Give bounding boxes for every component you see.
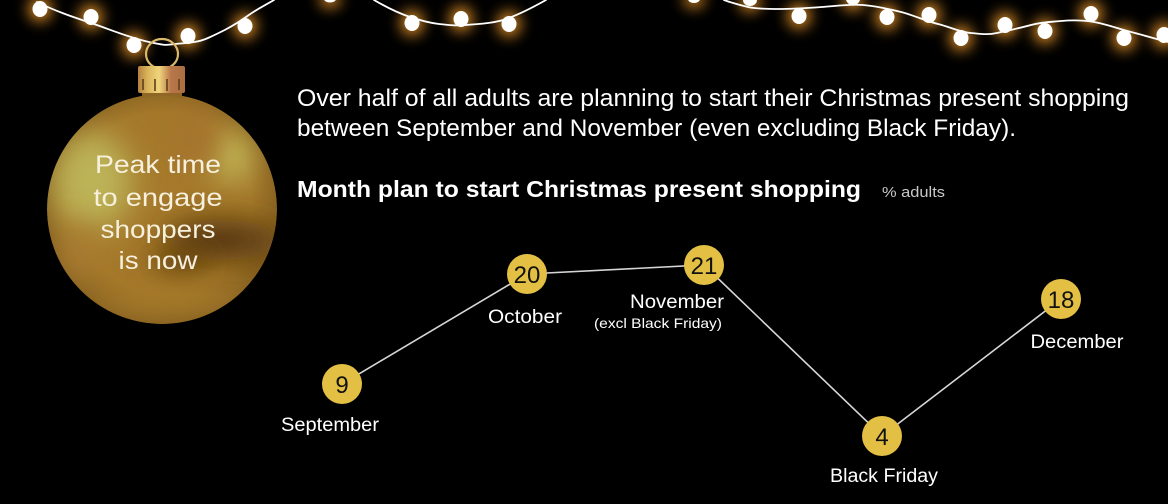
trend line bbox=[342, 265, 1061, 436]
line chart bbox=[281, 245, 1124, 487]
intro text: Over half of all adults are planning to start their Christmas present shopping bbox=[297, 85, 1129, 112]
point: Black Friday 4: 4 bbox=[875, 424, 889, 451]
chart heading: Month plan to start Christmas present shopping bbox=[297, 176, 861, 202]
string lights bbox=[28, 0, 1168, 58]
point: December 18 bbox=[1030, 279, 1124, 353]
point: November 21: November bbox=[630, 292, 725, 313]
point: Black Friday 4 bbox=[830, 416, 939, 487]
chart unit label: % adults bbox=[882, 184, 945, 201]
point: December 18: December bbox=[1030, 332, 1124, 353]
icon: bauble ring bbox=[146, 39, 178, 69]
bauble text: Peak time bbox=[95, 151, 221, 179]
intro text: between September and November (even excluding Black Friday). bbox=[297, 115, 1016, 142]
point: December 18: 18 bbox=[1048, 287, 1074, 314]
intro text bbox=[297, 85, 1129, 142]
point: September 9: 9 bbox=[335, 372, 349, 399]
point: Black Friday 4: Black Friday bbox=[830, 466, 939, 487]
bauble text: is now bbox=[118, 247, 199, 275]
bauble ornament bbox=[47, 39, 280, 324]
point: November 21: (excl Black Friday) bbox=[594, 315, 722, 331]
bauble text: shoppers bbox=[100, 216, 216, 244]
point: September 9: September bbox=[281, 415, 380, 436]
point: November 21 bbox=[594, 245, 725, 331]
icon: bauble sphere bbox=[47, 94, 280, 324]
bauble text bbox=[94, 151, 222, 275]
point: September 9 bbox=[281, 364, 380, 436]
icon: bauble cap bbox=[138, 66, 185, 98]
point: October 20: October bbox=[488, 307, 563, 328]
point: November 21: 21 bbox=[691, 253, 717, 280]
point: October 20 bbox=[488, 254, 563, 328]
bauble text: to engage bbox=[94, 184, 222, 212]
point: October 20: 20 bbox=[514, 262, 540, 289]
